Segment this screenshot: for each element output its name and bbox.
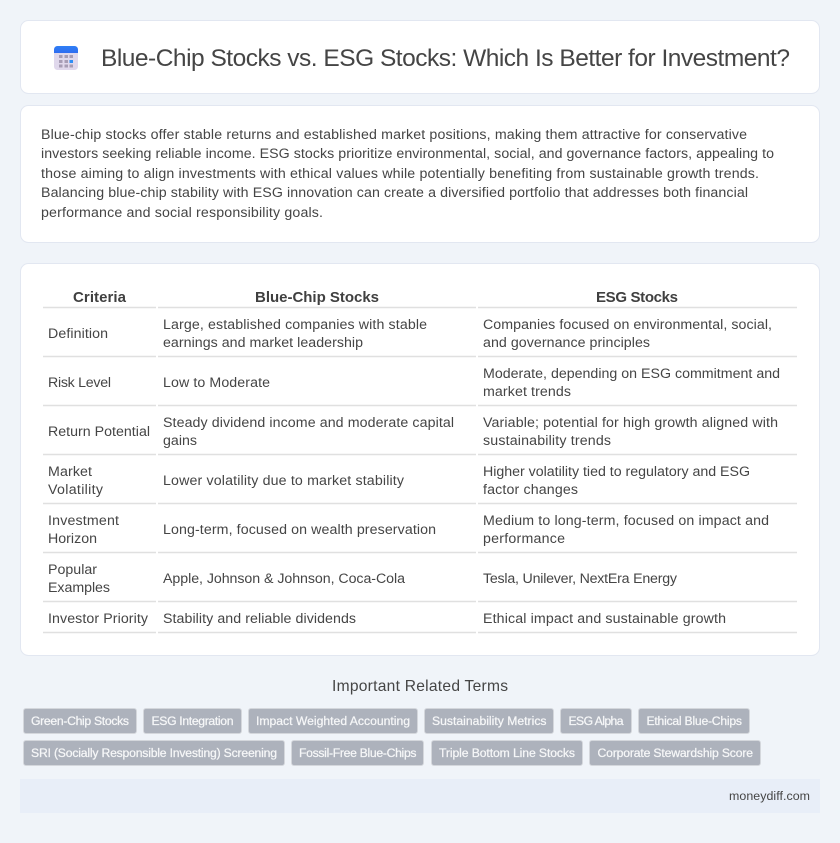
row: risk level: Risk Level — [48, 375, 111, 391]
row: return potential: Variable; potential for high growth aligned with — [483, 415, 778, 431]
row: definition: earnings and market leadership — [163, 335, 363, 351]
tag: triple bottom line stocks: Triple Bottom Line Stocks — [439, 746, 575, 760]
tag: impact weighted accounting: Impact Weighted Accounting — [256, 714, 410, 728]
panel: title header — [20, 20, 820, 94]
text block: summary paragraph: those aiming to align investments with ethical values while potentially benefiting from sustainable growth trends. — [41, 166, 759, 182]
text block: summary paragraph: Blue-chip stocks offer stable returns and established market positions, making them attractive for conservative — [41, 127, 747, 143]
row: investor priority — [48, 611, 726, 627]
row: return potential: gains — [163, 433, 197, 449]
table header: Criteria — [73, 289, 127, 306]
tag: green-chip stocks: Green-Chip Stocks — [31, 714, 129, 728]
row: definition: Companies focused on environmental, social, — [483, 317, 772, 333]
table header: Blue-Chip Stocks — [255, 289, 379, 306]
row: definition: and governance principles — [483, 335, 650, 351]
tag: corporate stewardship score: Corporate Stewardship Score — [598, 746, 753, 760]
panel: comparison table — [20, 264, 820, 656]
tag: esg alpha: ESG Alpha — [568, 714, 624, 728]
row: popular examples: Popular — [48, 562, 97, 578]
tag: sustainability metrics: Sustainability Metrics — [432, 714, 546, 728]
footer — [20, 779, 820, 813]
tag: corporate stewardship score — [590, 740, 760, 766]
row: risk level — [48, 366, 780, 400]
tag: esg integration: ESG Integration — [152, 714, 234, 728]
row: investor priority: Stability and reliable dividends — [163, 611, 356, 627]
row: market volatility: Lower volatility due to market stability — [163, 473, 405, 489]
row: risk level: market trends — [483, 384, 571, 400]
footer: source credit: moneydiff.com — [729, 789, 810, 803]
tag: sri screening — [24, 740, 284, 766]
tag: green-chip stocks — [24, 708, 136, 734]
row: definition: Definition — [48, 326, 108, 342]
tag: esg integration — [144, 708, 242, 734]
tag: esg alpha — [560, 708, 632, 734]
text block: summary paragraph — [41, 127, 774, 221]
row: investment horizon: performance — [483, 531, 565, 547]
row: market volatility: Volatility — [48, 482, 104, 498]
row: risk level: Low to Moderate — [163, 375, 270, 391]
row: risk level: Moderate, depending on ESG commitment and — [483, 366, 780, 382]
row: popular examples: Examples — [48, 580, 110, 596]
row: market volatility — [48, 464, 750, 498]
row: investment horizon: Medium to long-term, focused on impact and — [483, 513, 769, 529]
row: market volatility: Market — [48, 464, 92, 480]
table header — [73, 289, 678, 306]
tag: fossil-free blue-chips: Fossil-Free Blue-Chips — [299, 746, 416, 760]
text block: summary paragraph: investors seeking reliable income. ESG stocks prioritize environmental, social, and governance factors, appealing to — [41, 146, 774, 162]
row: investment horizon: Long-term, focused on wealth preservation — [163, 522, 436, 538]
row: definition: Large, established companies with stable — [163, 317, 427, 333]
tag: fossil-free blue-chips — [292, 740, 424, 766]
row: return potential: sustainability trends — [483, 433, 611, 449]
row: popular examples: Apple, Johnson & Johnson, Coca-Cola — [163, 571, 405, 587]
heading: important related terms: Important Related Terms — [332, 678, 508, 695]
row: popular examples — [48, 562, 678, 596]
row: market volatility: factor changes — [483, 482, 578, 498]
row: investment horizon: Horizon — [48, 531, 97, 547]
tags: related terms — [24, 708, 760, 766]
row: investor priority: Ethical impact and sustainable growth — [483, 611, 726, 627]
tag: ethical blue-chips — [638, 708, 750, 734]
table header: ESG Stocks — [596, 289, 678, 306]
title: Blue-Chip Stocks vs. ESG Stocks: Which Is Better for Investment? — [101, 45, 790, 72]
tag: sustainability metrics — [424, 708, 554, 734]
row: return potential: Return Potential — [48, 424, 150, 440]
panel: introduction — [20, 106, 820, 242]
text block: summary paragraph: performance and social responsibility goals. — [41, 205, 323, 221]
row: definition — [48, 317, 772, 351]
tag: ethical blue-chips: Ethical Blue-Chips — [646, 714, 742, 728]
icon: calendar — [54, 46, 78, 70]
row: return potential — [48, 415, 778, 449]
tag: sri screening: SRI (Socially Responsible Investing) Screening — [31, 746, 277, 760]
row: investment horizon — [48, 513, 769, 547]
row: investment horizon: Investment — [48, 513, 119, 529]
row: popular examples: Tesla, Unilever, NextEra Energy — [483, 571, 678, 587]
tag: impact weighted accounting — [248, 708, 418, 734]
tag: triple bottom line stocks — [432, 740, 582, 766]
text block: summary paragraph: Balancing blue-chip stability with ESG innovation can create a diversified portfolio that addresses both financial — [41, 185, 748, 201]
row: return potential: Steady dividend income and moderate capital — [163, 415, 454, 431]
row: market volatility: Higher volatility tied to regulatory and ESG — [483, 464, 750, 480]
row: investor priority: Investor Priority — [48, 611, 149, 627]
